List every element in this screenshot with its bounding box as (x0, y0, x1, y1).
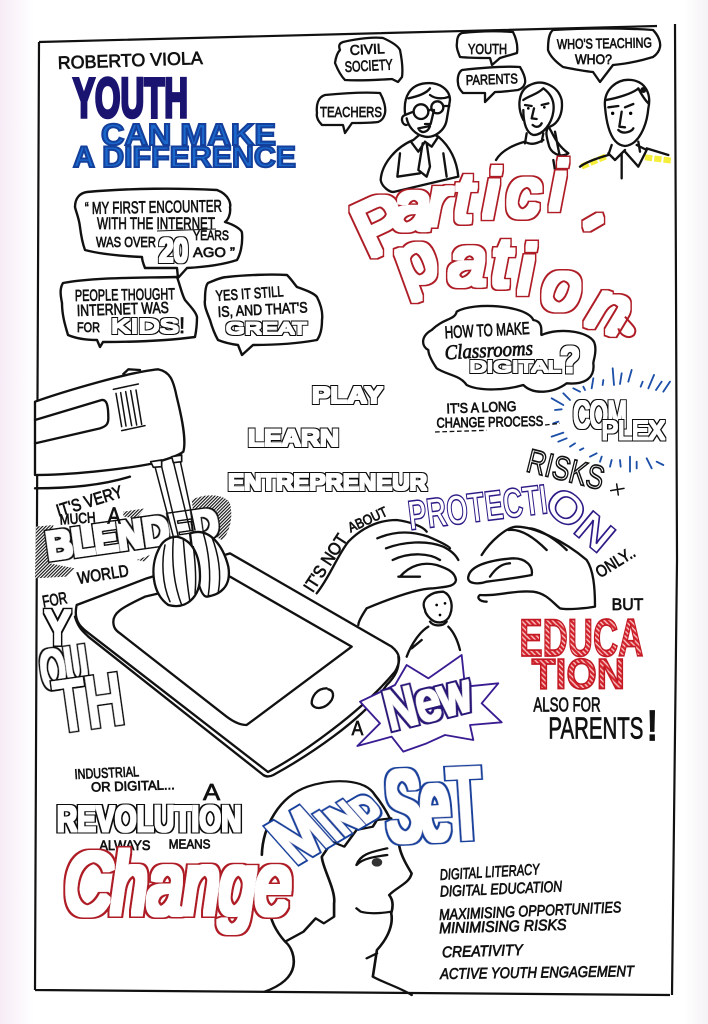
bubble: parents (458, 67, 525, 102)
heading: participation: P (340, 176, 420, 273)
heading: participation: a (448, 224, 486, 300)
speech bubble: yes it still is: IS, AND THAT'S (217, 299, 308, 321)
revolution block: A (203, 780, 220, 805)
man with glasses (381, 83, 458, 192)
thought cloud: classrooms digital (423, 306, 595, 392)
speech bubble: first encounter: YEARS (193, 227, 229, 243)
revolution block: ALWAYS (99, 838, 150, 854)
risks +: RISKS (523, 443, 608, 498)
speech bubbles: stakeholders: CIVIL (349, 40, 385, 58)
bubble: civil society (335, 38, 402, 82)
speech bubbles: stakeholders (317, 28, 660, 133)
for youth lettering: Y (45, 601, 71, 655)
thought cloud: classrooms digital: ? (560, 340, 580, 381)
speech bubble: yes it still is (205, 275, 322, 355)
for youth lettering: FOR (41, 588, 69, 611)
heading: participation: i (550, 148, 567, 224)
title block (57, 48, 296, 174)
speech bubble: people thought: KIDS (111, 316, 179, 338)
heading: participation (340, 148, 642, 351)
speech bubble: people thought: ! (179, 313, 185, 338)
people (381, 80, 672, 192)
heading: participation: r (427, 164, 453, 240)
play learn entrepreneur words (228, 382, 427, 495)
speech bubbles: stakeholders: SOCIETY (344, 57, 393, 76)
speech bubbles: stakeholders: YOUTH (468, 41, 507, 58)
play learn entrepreneur words: LEARN (248, 425, 339, 452)
but: BUT (612, 595, 643, 614)
thought cloud: classrooms digital: HOW TO MAKE (444, 318, 530, 342)
heading: participation: i (518, 232, 535, 308)
protection hands and child: ABOUT (345, 503, 390, 535)
speech bubble: yes it still is: GREAT (226, 319, 307, 338)
key points list: DIGITAL LITERACY (439, 860, 541, 884)
speech bubble: first encounter: WITH THE INTERNET (97, 214, 215, 233)
change heading: Change (65, 834, 291, 933)
small caption: IT'S VERY (54, 481, 125, 520)
protection lettering: PROTECTI (405, 475, 550, 539)
complex lettering: COM (573, 394, 627, 437)
text: SeT (383, 747, 484, 863)
heading: participation: c (507, 156, 541, 232)
young man (580, 80, 672, 178)
protection lettering (405, 443, 643, 614)
complex callout with rays: PLEX (602, 416, 665, 446)
speech bubble: yes it still is: YES IT STILL (215, 283, 284, 305)
mixer beaters (190, 532, 229, 597)
thought cloud: classrooms digital: Classrooms (444, 338, 533, 364)
tablet (75, 553, 399, 777)
heading: a difference: A DIFFERENCE (73, 141, 296, 174)
revolution block: OR DIGITAL... (91, 779, 175, 795)
speech bubble: first encounter: “ MY FIRST ENCOUNTER (85, 197, 222, 218)
for youth lettering: OU (36, 633, 92, 701)
revolution block (57, 765, 241, 854)
speech bubbles: stakeholders: WHO? (575, 51, 612, 67)
complex callout with rays (435, 368, 670, 472)
mindset lettering: MIND (255, 767, 392, 875)
complex callout with rays: CHANGE PROCESS (436, 413, 543, 431)
icon: eye (372, 858, 382, 867)
head profile (262, 781, 412, 995)
mindset lettering (255, 747, 484, 875)
left hand (317, 520, 458, 625)
speaker name: ROBERTO VIOLA (57, 48, 203, 73)
speech bubble: people thought: PEOPLE THOUGHT (75, 286, 175, 305)
for youth lettering (36, 588, 128, 748)
blended world lettering: A (107, 502, 121, 528)
blended world lettering (35, 481, 231, 588)
key points list: MAXIMISING OPPORTUNITIES (438, 898, 622, 924)
bubble: teachers (317, 93, 385, 133)
education block: ! (647, 703, 658, 751)
heading: participation: i (483, 156, 500, 232)
heading: participation: a (393, 168, 431, 244)
icon: home button (312, 688, 333, 708)
new burst: A (352, 718, 364, 740)
only: ONLY.. (592, 543, 639, 582)
heading: participation: - (561, 180, 619, 257)
education block: PARENTS (548, 711, 643, 745)
play learn entrepreneur words: PLAY (312, 382, 383, 408)
bubble: youth (457, 31, 517, 65)
protection hands and child (299, 503, 595, 657)
mixer body (35, 369, 184, 475)
heading: participation: n (580, 267, 642, 351)
education block: TION (532, 650, 625, 698)
education block: EDUCA (519, 609, 643, 668)
mixer stems (155, 460, 195, 537)
blended world lettering: WORLD (76, 561, 130, 588)
education block (519, 609, 658, 751)
for youth lettering: TH (49, 659, 128, 748)
rays (552, 368, 670, 472)
key points list: DIGITAL EDUCATION (439, 877, 563, 900)
hand mixer (35, 369, 229, 606)
speech bubble: first encounter: AGO ” (193, 244, 235, 260)
speech bubble: people thought: INTERNET WAS (77, 300, 169, 320)
heading: can make: CAN MAKE (101, 117, 276, 152)
heading: participation: t (454, 161, 476, 237)
blended word: BLENDED (43, 501, 221, 569)
child figure (407, 592, 460, 657)
key points list (438, 860, 635, 983)
heading: youth: YOUTH (73, 66, 188, 129)
speech bubble: people thought: FOR (77, 319, 100, 335)
bubble: who's teaching who (548, 28, 660, 82)
speech bubble: first encounter: WAS OVER (96, 234, 156, 251)
heading: participation: p (383, 216, 447, 302)
revolution block: INDUSTRIAL (74, 765, 140, 783)
speech bubble: people thought (61, 277, 197, 347)
protection lettering: ON (535, 478, 624, 563)
woman (496, 83, 568, 170)
also for parents: ALSO FOR (533, 695, 601, 717)
heading: participation: t (492, 226, 514, 302)
play learn entrepreneur words: ENTREPRENEUR (228, 469, 427, 495)
right hand (468, 527, 595, 609)
speech bubble: first encounter: 20 (159, 232, 188, 270)
thought cloud: classrooms digital: DIGITAL (469, 359, 561, 376)
key points list: MINIMISING RISKS (439, 915, 567, 937)
revolution block: MEANS (169, 838, 210, 852)
hatched shadow (35, 495, 231, 578)
key points list: CREATIVITY (442, 941, 524, 961)
it's not about: IT'S NOT (299, 530, 352, 596)
blended world lettering: MUCH (59, 510, 96, 529)
new burst: New (378, 660, 477, 742)
heading: participation: o (538, 246, 586, 327)
speech bubbles: stakeholders: WHO'S TEACHING (557, 34, 652, 52)
speech bubbles: stakeholders: PARENTS (466, 70, 518, 88)
long change process note: IT'S A LONG (446, 398, 517, 416)
speech bubble: first encounter (75, 189, 242, 278)
revolution block: REVOLUTION (57, 798, 241, 840)
speech bubbles: stakeholders: TEACHERS (320, 104, 382, 121)
